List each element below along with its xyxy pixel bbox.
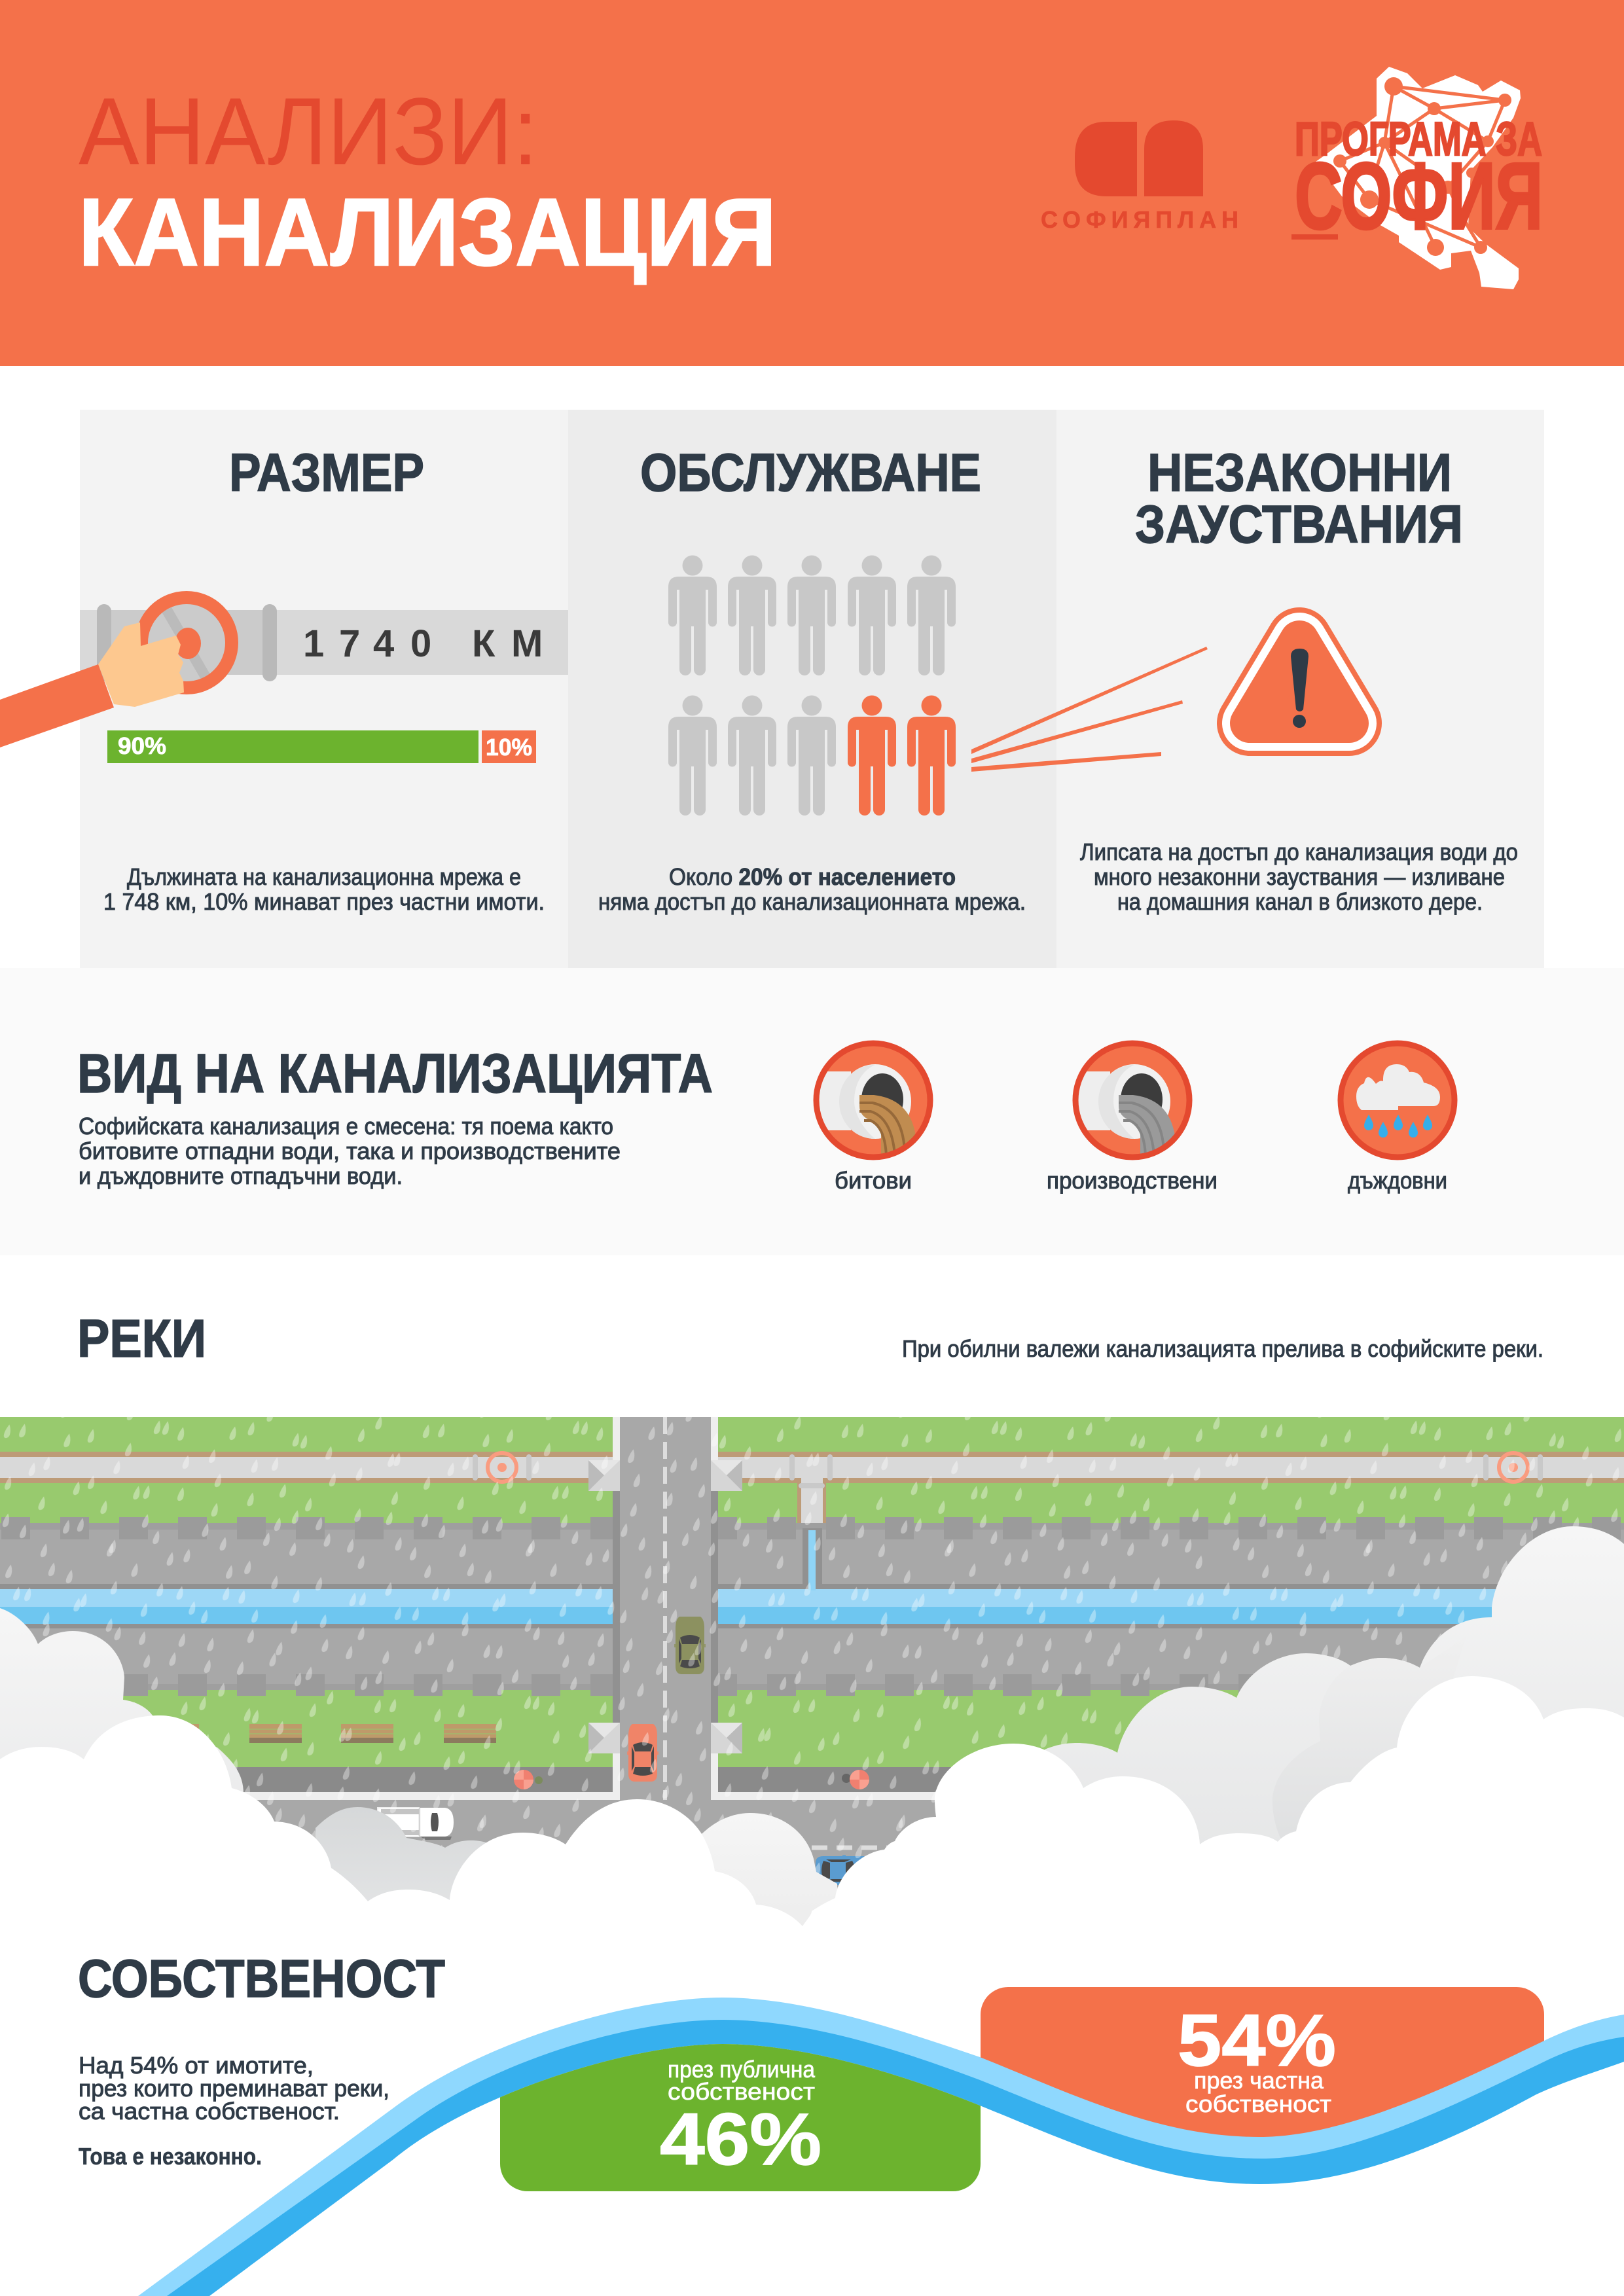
text: service description bbox=[598, 863, 1026, 915]
icon: hand turning valve wheel bbox=[0, 598, 232, 747]
icon: pipe bbox=[80, 604, 568, 681]
clouds: side right bbox=[1272, 1636, 1466, 1846]
panel: service bbox=[568, 410, 1056, 968]
arrows: rays from people to warning bbox=[971, 647, 1208, 772]
heading: illegal connections: НЕЗАКОННИ bbox=[1147, 443, 1452, 503]
box: public ownership bbox=[500, 2044, 981, 2191]
stat: public ownership bbox=[660, 2056, 821, 2180]
bar: 90 / 10 split: 10% bbox=[486, 734, 532, 761]
pedestrians with umbrellas bbox=[514, 1770, 869, 1789]
label: household: битови bbox=[835, 1167, 912, 1194]
panel: header bbox=[0, 0, 1624, 366]
targets on pipe bbox=[488, 1453, 1528, 1482]
text: sewerage type description: и дъждовните отпадъчни води. bbox=[79, 1162, 403, 1189]
clouds: back left bbox=[0, 1608, 244, 1957]
text: sewerage type description: битовите отпадни води, така и производствените bbox=[79, 1138, 621, 1164]
grass strips bbox=[0, 1417, 1624, 1770]
icon: industrial wastewater pipe bbox=[1071, 1043, 1189, 1165]
logo: Sofiaplan bbox=[1041, 120, 1238, 233]
logo: Sofiaplan: СОФИЯПЛАН bbox=[1041, 206, 1238, 233]
text: size description bbox=[103, 863, 545, 915]
panel: illegal connections bbox=[1056, 410, 1544, 968]
text: sewerage type description bbox=[79, 1113, 621, 1189]
pipe length: 1740 КМ bbox=[303, 622, 543, 665]
text: ownership description: Това е незаконно. bbox=[79, 2143, 262, 2170]
lower embankment bbox=[0, 1624, 1624, 1696]
heading: rivers: РЕКИ bbox=[77, 1309, 206, 1369]
heading: service: ОБСЛУЖВАНЕ bbox=[640, 443, 981, 503]
benches bbox=[147, 1724, 496, 1743]
icon: rain cloud bbox=[1341, 1043, 1454, 1157]
chart: river wave bbox=[138, 1998, 1624, 2296]
text: ownership description bbox=[79, 2052, 389, 2170]
pavement and lower road bbox=[0, 1767, 1624, 1957]
title: analyses: АНАЛИЗИ: bbox=[79, 78, 538, 185]
upper embankment bbox=[0, 1517, 1624, 1589]
stat: public ownership: 46% bbox=[660, 2098, 821, 2180]
text: illegal connections description bbox=[1080, 838, 1518, 915]
clouds: front white bbox=[0, 1676, 1624, 1957]
heading: illegal connections bbox=[1135, 443, 1463, 554]
label: industrial: производствени bbox=[1047, 1167, 1218, 1194]
bar: 90 / 10 split bbox=[107, 730, 536, 763]
text: sewerage type description: Софийската канализация е смесена: тя поема както bbox=[79, 1113, 613, 1139]
pictogram: ten people, two highlighted bbox=[668, 555, 956, 816]
heading: illegal connections: ЗАУСТВАНИЯ bbox=[1135, 495, 1463, 554]
panel: size bbox=[0, 410, 568, 968]
white pickup bbox=[378, 1808, 454, 1840]
rain bbox=[0, 1417, 1624, 1941]
stat: private ownership: собственост bbox=[1185, 2090, 1331, 2117]
text: illegal connections description: много незаконни зауствания — изливане bbox=[1094, 863, 1505, 890]
heading: sewerage type: ВИД НА КАНАЛИЗАЦИЯТА bbox=[77, 1043, 713, 1104]
text: size description: 1 748 км, 10% минават през частни имоти. bbox=[103, 888, 545, 915]
text: service description: няма достъп до канализационната мрежа. bbox=[598, 888, 1026, 915]
river water bbox=[0, 1589, 1624, 1624]
text: size description: Дължината на канализационна мрежа е bbox=[127, 863, 521, 890]
bridge road bbox=[613, 1417, 718, 1875]
stat: private ownership bbox=[1178, 2000, 1336, 2117]
icon: warning triangle bbox=[1250, 640, 1349, 728]
stat: public ownership: собственост bbox=[668, 2078, 815, 2105]
clouds: back middle bbox=[702, 1813, 837, 1937]
logo: Programme for Sofia with map bbox=[1291, 67, 1543, 289]
bridge corners bbox=[588, 1460, 742, 1753]
text: ownership description: са частна собственост. bbox=[79, 2098, 340, 2125]
stat: public ownership: през публична bbox=[668, 2056, 816, 2083]
heading: ownership: СОБСТВЕНОСТ bbox=[78, 1949, 445, 2009]
icon: household wastewater pipe bbox=[812, 1043, 930, 1165]
text: ownership description: през които преминават реки, bbox=[79, 2075, 389, 2102]
box: private ownership bbox=[981, 1987, 1544, 2236]
stat: private ownership: през частна bbox=[1194, 2067, 1324, 2094]
text: ownership description: Над 54% от имотите, bbox=[79, 2052, 314, 2079]
text: service description: Около 20% от населението bbox=[669, 863, 956, 890]
title: sewerage: КАНАЛИЗАЦИЯ bbox=[79, 179, 776, 285]
cars bbox=[378, 1617, 873, 1886]
text: illegal connections description: на домашния канал в близкото дере. bbox=[1117, 888, 1483, 915]
heading: size: РАЗМЕР bbox=[229, 443, 424, 503]
bar: 90 / 10 split: 90% bbox=[118, 732, 166, 759]
panel: sewerage type bbox=[79, 1041, 1457, 1194]
overflow stream bbox=[803, 1528, 822, 1590]
clouds: back centre bbox=[316, 1807, 486, 1937]
label: rainwater: дъждовни bbox=[1348, 1167, 1447, 1194]
clouds: back right bbox=[1045, 1526, 1624, 1931]
stat: private ownership: 54% bbox=[1178, 2000, 1336, 2081]
sewer pipe along river bbox=[0, 1452, 1624, 1532]
illustration: river scene in the rain bbox=[0, 1417, 1624, 1957]
text: illegal connections description: Липсата на достъп до канализация води до bbox=[1080, 838, 1518, 865]
logo: Programme for Sofia with map: ПРОГРАМА ЗА bbox=[1295, 113, 1542, 166]
text: rivers description: При обилни валежи канализацията прелива в софийските реки. bbox=[902, 1335, 1543, 1362]
